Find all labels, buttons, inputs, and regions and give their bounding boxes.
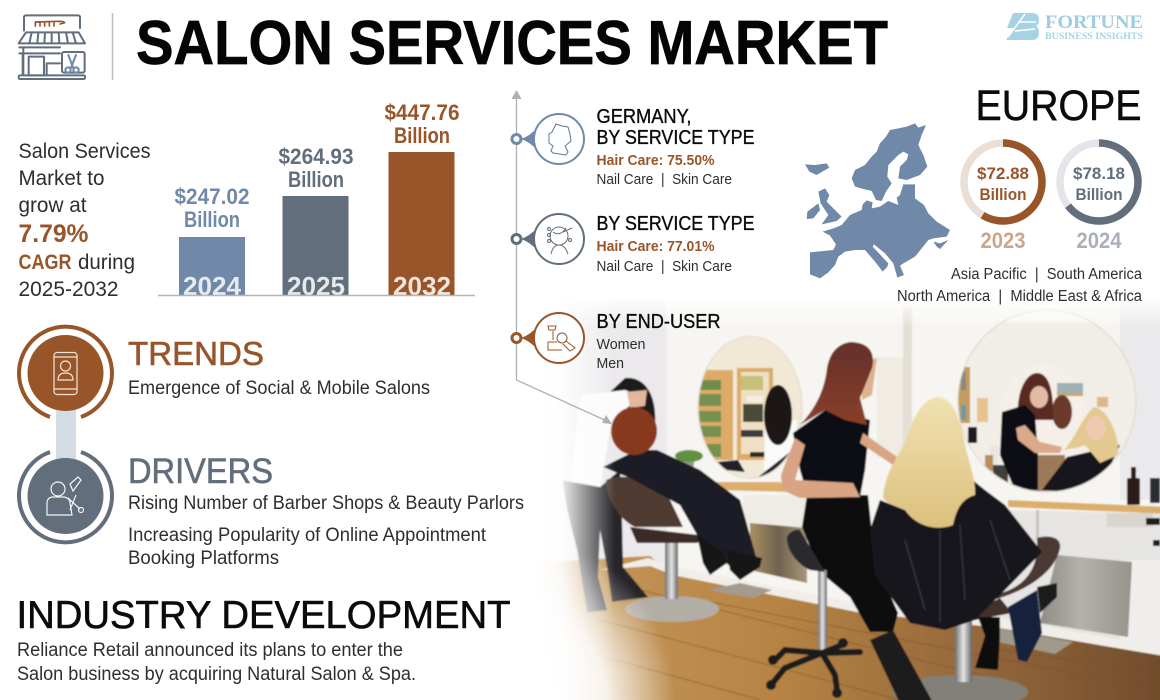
panel: trends text (128, 335, 430, 399)
text: market growth statement: CAGR (18, 251, 72, 274)
donut: 2023 value: Billion (980, 185, 1026, 204)
segment: Germany by service type: GERMANY, (596, 106, 692, 128)
bar 2025: 2025 (287, 271, 345, 301)
center stylist boot (870, 630, 936, 700)
bar 2025: Billion (288, 167, 344, 192)
text: market growth statement: 2025-2032 (18, 278, 118, 301)
text: other regions (897, 266, 1142, 305)
counter tops (713, 482, 1160, 514)
segment: by end-user: Women (596, 336, 646, 353)
donut: 2024 value (1060, 143, 1138, 253)
connector between trends and drivers (56, 408, 76, 462)
segment: by end-user: BY END-USER (596, 311, 720, 333)
panel: trends text: Emergence of Social & Mobile Salons (128, 378, 430, 399)
text: other regions: North America | Middle East & Africa (897, 288, 1142, 305)
donut: 2023 value: $72.88 (977, 164, 1029, 183)
bar 2024 (174, 184, 250, 301)
segment: by end-user: Men (596, 355, 624, 372)
heading: Europe: EUROPE (976, 82, 1142, 130)
donut: 2023 value (964, 143, 1042, 253)
panel: drivers text (128, 452, 524, 569)
bar 2032: 2032 (393, 271, 451, 301)
photo: salon interior with stylists and clients (530, 290, 1160, 700)
text: market growth statement: Market to (18, 167, 104, 190)
center stylist (781, 342, 898, 632)
arrow: timeline line pointing up and to the photo (512, 90, 612, 424)
donut: 2024 value: Billion (1076, 185, 1122, 204)
segment: Germany by service type (512, 106, 754, 188)
segment: by service type: BY SERVICE TYPE (596, 213, 754, 235)
wall socket and plug (1107, 513, 1160, 546)
blonde client with chair (870, 397, 1060, 700)
bar 2025 (278, 144, 354, 301)
panel: drivers text: DRIVERS (128, 452, 273, 491)
text: market growth statement (18, 140, 150, 301)
icon: salon storefront (19, 15, 85, 79)
bar 2024: Billion (184, 207, 240, 232)
text: market growth statement: grow at (18, 194, 87, 217)
segment: by service type: Hair Care: 77.01% (596, 239, 715, 255)
segment: by service type: Nail Care | Skin Care (596, 258, 732, 275)
title: SALON SERVICES MARKET (136, 9, 888, 78)
bar chart: market size (158, 100, 475, 301)
bar 2032: Billion (394, 123, 450, 148)
icon: trends mobile salon (19, 327, 112, 417)
panel: industry development: Reliance Retail announced its plans to enter the (17, 640, 403, 661)
segment: Germany by service type: Nail Care | Skin Care (596, 171, 732, 188)
left client with chair (603, 407, 762, 622)
right mirror with reflection (958, 324, 1121, 492)
map: Europe (805, 123, 950, 278)
icon: hair wash in circle (512, 313, 584, 363)
bar 2024: $247.02 (174, 184, 250, 209)
text: other regions: Asia Pacific | South America (951, 266, 1142, 283)
text: market growth statement: during (78, 251, 135, 274)
panel: drivers text: Increasing Popularity of Online Appointment (128, 525, 487, 546)
segment: by end-user (512, 311, 720, 372)
panel: industry development (16, 594, 510, 685)
photo fades into white page (540, 296, 1160, 700)
bottle and phone on counter (1127, 467, 1160, 505)
donut: 2023 value: 2023 (980, 228, 1026, 253)
segment: Germany by service type: BY SERVICE TYPE (596, 127, 754, 149)
bar 2025: $264.93 (278, 144, 354, 169)
logo: Fortune Business Insights (1006, 13, 1143, 42)
header divider (112, 13, 114, 80)
segment: by service type (512, 213, 754, 275)
left stylist (562, 378, 655, 613)
text: market growth statement: Salon Services (18, 140, 150, 163)
panel: drivers text: Rising Number of Barber Shops & Beauty Parlors (128, 493, 524, 514)
panel: trends text: TRENDS (128, 335, 264, 372)
panel: industry development: INDUSTRY DEVELOPMENT (16, 594, 510, 637)
panel: drivers text: Booking Platforms (128, 548, 279, 569)
plant (675, 450, 703, 470)
panel: industry development: Salon business by acquiring Natural Salon & Spa. (17, 664, 416, 685)
center stool (766, 530, 860, 698)
segment: Germany by service type: Hair Care: 75.50% (596, 153, 715, 169)
icon: drivers stylist (19, 452, 112, 542)
bar 2032: $447.76 (384, 100, 460, 125)
donut: 2024 value: 2024 (1076, 228, 1122, 253)
under-counter panels (708, 495, 1132, 654)
donut: 2024 value: $78.18 (1073, 164, 1125, 183)
bar 2032 (384, 100, 460, 301)
text: market growth statement: 7.79% (18, 220, 88, 248)
logo: Fortune Business Insights: BUSINESS INSIGHTS (1045, 32, 1143, 42)
logo: Fortune Business Insights: FORTUNE (1045, 13, 1143, 33)
left mirror with shelves (698, 336, 802, 480)
icon: face care in circle (512, 214, 584, 264)
icon: Germany map in circle (512, 114, 584, 164)
bar 2024: 2024 (183, 271, 242, 301)
